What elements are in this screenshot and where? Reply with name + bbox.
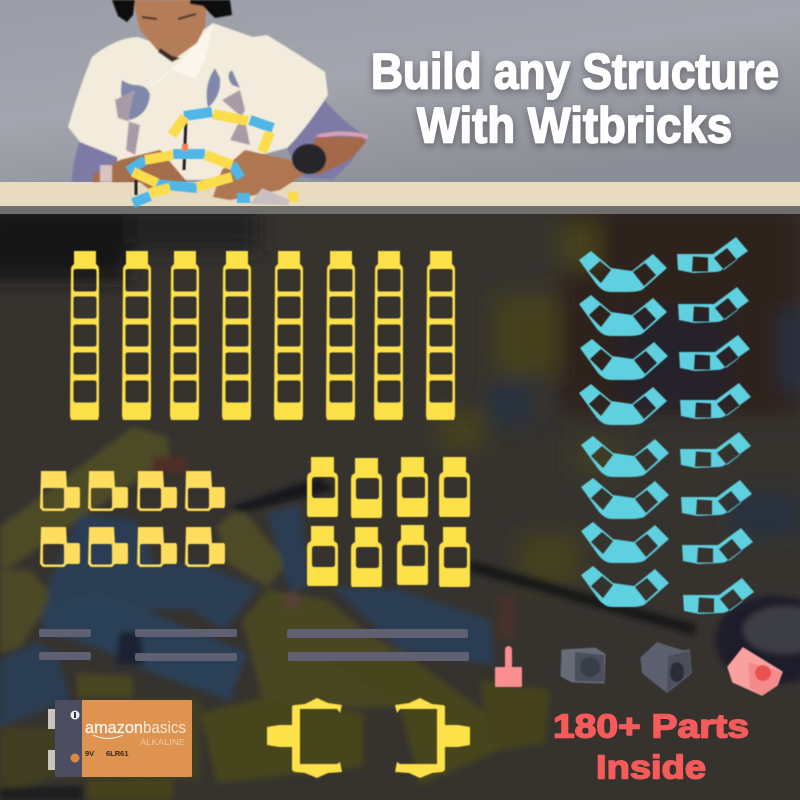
icon: pink hex connector (728, 648, 782, 695)
long yellow bricks row (70, 251, 455, 420)
table (0, 182, 800, 206)
title: With Witbricks (417, 100, 732, 156)
callout: 180+ parts inside: 180+ Parts (553, 708, 749, 744)
icon: grey square connector (561, 648, 605, 683)
battery: 9V (85, 749, 94, 758)
icon: pink peg (495, 646, 522, 687)
battery: amazon (85, 718, 143, 737)
battery (48, 700, 192, 777)
teal V connectors, small column (677, 237, 754, 614)
grey rods (39, 629, 469, 661)
title: With Witbricks (417, 98, 732, 154)
boy figure (68, 0, 368, 182)
teal V connectors, large column (579, 251, 669, 607)
callout: 180+ parts inside (553, 708, 749, 786)
battery: 6LR61 (106, 749, 129, 758)
medium yellow bricks (307, 457, 470, 587)
hands and watch (93, 144, 326, 200)
icon: dark grey sleeve connector (641, 643, 691, 692)
blurred photo background: bricks (0, 205, 800, 800)
title (371, 44, 779, 156)
built model (128, 112, 298, 205)
photo panel: child building a structure (0, 0, 800, 214)
yellow end clips (267, 698, 470, 778)
battery: basics (143, 718, 186, 737)
battery: ALKALINE (140, 737, 185, 747)
small yellow L bricks (40, 471, 225, 567)
wall (0, 0, 800, 182)
callout: 180+ parts inside: Inside (596, 748, 706, 786)
